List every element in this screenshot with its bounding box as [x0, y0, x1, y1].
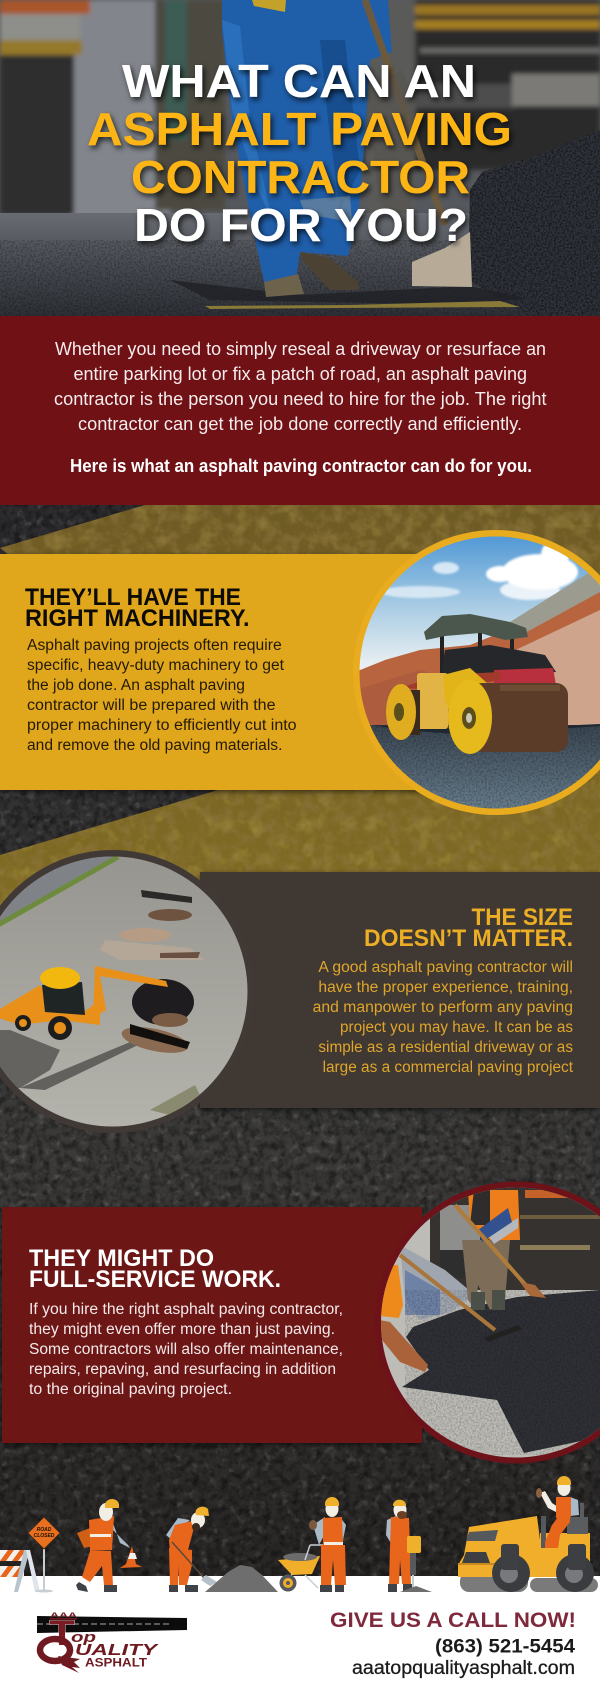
body text [27, 637, 297, 754]
body text: have the proper experience, training, [318, 979, 573, 996]
road roller with driver [458, 1476, 598, 1592]
logo: AAA Top Quality Asphalt: T [49, 1614, 75, 1653]
heading: RIGHT MACHINERY. [25, 605, 250, 632]
rakes and broom [380, 1205, 546, 1372]
roller [386, 614, 568, 754]
panel: introduction [0, 316, 600, 505]
left worker vest [380, 1265, 403, 1318]
worker with shovel [166, 1507, 217, 1592]
intro text [54, 339, 546, 434]
title: WHAT CAN AN [122, 55, 476, 107]
body text: and remove the old paving materials. [27, 737, 282, 754]
title: CONTRACTOR [131, 151, 470, 203]
body text: the job done. An asphalt paving [27, 677, 245, 694]
body text: large as a commercial paving project [323, 1059, 574, 1076]
heading: DOESN’T MATTER. [364, 925, 573, 952]
heading: THEY MIGHT DO [29, 1245, 214, 1272]
worker with wheelbarrow [309, 1497, 346, 1592]
panel: right machinery [0, 530, 600, 820]
intro text: contractor can get the job done correctly and efficiently. [78, 414, 522, 434]
body text: If you hire the right asphalt paving contractor, [29, 1301, 343, 1318]
logo: AAA Top Quality Asphalt: ASPHALT [85, 1656, 148, 1670]
panel: size doesn't matter [0, 850, 600, 1133]
logo: AAA Top Quality Asphalt [37, 1610, 187, 1673]
background: asphalt texture with yellow road marking [0, 505, 600, 1580]
body text: they might even offer more than just paving. [29, 1321, 335, 1338]
icon: road closed sign: CLOSED [34, 1533, 55, 1539]
title [87, 55, 512, 251]
intro text: contractor is the person you need to hire for the job. The right [54, 389, 546, 409]
logo: AAA Top Quality Asphalt: UALITY [75, 1642, 159, 1659]
website: aaatopqualityasphalt.com [352, 1658, 575, 1679]
heading [364, 904, 573, 952]
heading [25, 584, 250, 632]
logo: AAA Top Quality Asphalt: AAA [50, 1610, 78, 1620]
intro text: entire parking lot or fix a patch of road, an asphalt paving [74, 364, 527, 384]
worker with jackhammer [386, 1500, 432, 1592]
intro bold line: Here is what an asphalt paving contractor can do for you. [70, 456, 532, 476]
panel: full-service work [2, 1182, 600, 1470]
call to action heading: GIVE US A CALL NOW! [330, 1608, 576, 1632]
footer: white band [0, 1576, 600, 1700]
title: ASPHALT PAVING [87, 103, 512, 155]
heading: THE SIZE [472, 904, 573, 931]
title: DO FOR YOU? [134, 199, 468, 251]
body text: simple as a residential driveway or as [318, 1039, 573, 1056]
body text: project you may have. It can be as [340, 1019, 573, 1036]
body text: specific, heavy-duty machinery to get [27, 657, 285, 674]
heading: THEY’LL HAVE THE [25, 584, 241, 611]
body text: Asphalt paving projects often require [27, 637, 282, 654]
icon: road closed sign [28, 1517, 60, 1592]
heading [29, 1245, 281, 1293]
backhoe [0, 966, 168, 1040]
body text: repairs, repaving, and resurfacing in addition [29, 1361, 336, 1378]
body text [313, 959, 574, 1076]
circle photo: workers raking asphalt [375, 1182, 600, 1470]
gravel pile [469, 130, 600, 316]
logo: AAA Top Quality Asphalt: op [71, 1629, 96, 1646]
wheelbarrow [278, 1545, 330, 1592]
body text: and manpower to perform any paving [313, 999, 573, 1016]
hero photo: worker and paving machine [0, 0, 600, 316]
body text: to the original paving project. [29, 1381, 232, 1398]
driver [536, 1476, 579, 1548]
worker boots [264, 252, 358, 297]
intro text: Whether you need to simply reseal a driveway or resurface an [55, 339, 546, 359]
heading: FULL-SERVICE WORK. [29, 1266, 281, 1293]
worker carrying cones [76, 1499, 142, 1592]
standing worker [462, 1190, 520, 1310]
gravel pile [205, 1565, 278, 1592]
icon: barricade [0, 1550, 40, 1592]
body text: proper machinery to efficiently cut into [27, 717, 297, 734]
worker trousers [222, 0, 392, 282]
circle photo: road roller [353, 530, 600, 820]
body text: Some contractors will also offer maintenance, [29, 1341, 343, 1358]
body text: contractor will be prepared with the [27, 697, 276, 714]
body text: A good asphalt paving contractor will [318, 959, 573, 976]
circle photo: backhoe on lot [0, 850, 254, 1133]
body text [29, 1301, 343, 1398]
phone number: (863) 521-5454 [435, 1636, 575, 1658]
icon: road closed sign: ROAD [37, 1527, 52, 1533]
shovel [365, 0, 472, 287]
